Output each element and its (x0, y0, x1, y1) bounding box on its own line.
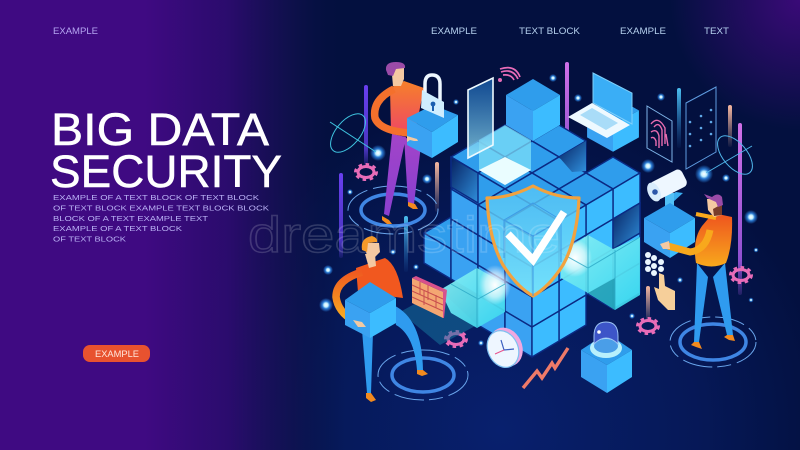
body text block: EXAMPLE OF A TEXT BLOCK OF TEXT BLOCK (53, 193, 259, 202)
title (50, 104, 282, 197)
body text block: OF TEXT BLOCK (53, 234, 126, 244)
orbit left (324, 108, 376, 158)
person bottom left with cube (336, 236, 428, 402)
title: BIG DATA (51, 104, 269, 155)
navigation: TEXT (704, 26, 730, 36)
shaded hollow cells (451, 157, 478, 203)
body text block: EXAMPLE OF A TEXT BLOCK (53, 224, 182, 233)
gears (356, 164, 752, 346)
person right (660, 194, 735, 349)
navigation: EXAMPLE (431, 26, 477, 36)
wifi icon (498, 68, 520, 82)
vertical light bars (339, 62, 742, 322)
button: EXAMPLE (95, 349, 139, 359)
title: SECURITY (50, 146, 282, 197)
person top with padlock (375, 62, 458, 224)
glass cube right lower (561, 235, 640, 310)
laptop on cube (568, 73, 639, 152)
navigation: EXAMPLE (620, 26, 666, 36)
orbit right (706, 130, 759, 180)
cube held by person bottom (345, 282, 396, 338)
central data cube structure (400, 79, 640, 357)
glass cube top (479, 125, 531, 185)
keypad and hand (645, 252, 675, 310)
button (83, 345, 150, 362)
growth chart line (523, 348, 568, 388)
top cube on stack (506, 79, 560, 141)
ring platform left top (348, 186, 438, 234)
body text block: BLOCK OF A TEXT EXAMPLE TEXT (53, 214, 208, 223)
dome on cube (581, 322, 632, 393)
shield (487, 186, 579, 296)
floor shadow (400, 290, 477, 345)
glow dots (319, 74, 758, 346)
navigation: TEXT BLOCK (519, 26, 580, 36)
cube under person right (644, 203, 695, 258)
security camera (644, 168, 689, 206)
fingerprint panel (647, 106, 672, 162)
firewall brick (412, 276, 447, 318)
navigation (431, 26, 730, 36)
dot matrix panel (686, 87, 716, 169)
padlock (421, 75, 444, 118)
body text block: OF TEXT BLOCK EXAMPLE TEXT BLOCK BLOCK (53, 204, 269, 212)
ring platform right (670, 317, 756, 367)
cube held by person top (407, 105, 458, 158)
check mark (508, 212, 564, 260)
clock (481, 322, 529, 373)
watermark: dreamstime (248, 207, 560, 263)
ring platform bottom (378, 350, 468, 400)
body text block (53, 193, 269, 244)
phone glass (468, 78, 493, 158)
glass cube left lower (440, 268, 505, 328)
top-left label: EXAMPLE (53, 26, 98, 36)
